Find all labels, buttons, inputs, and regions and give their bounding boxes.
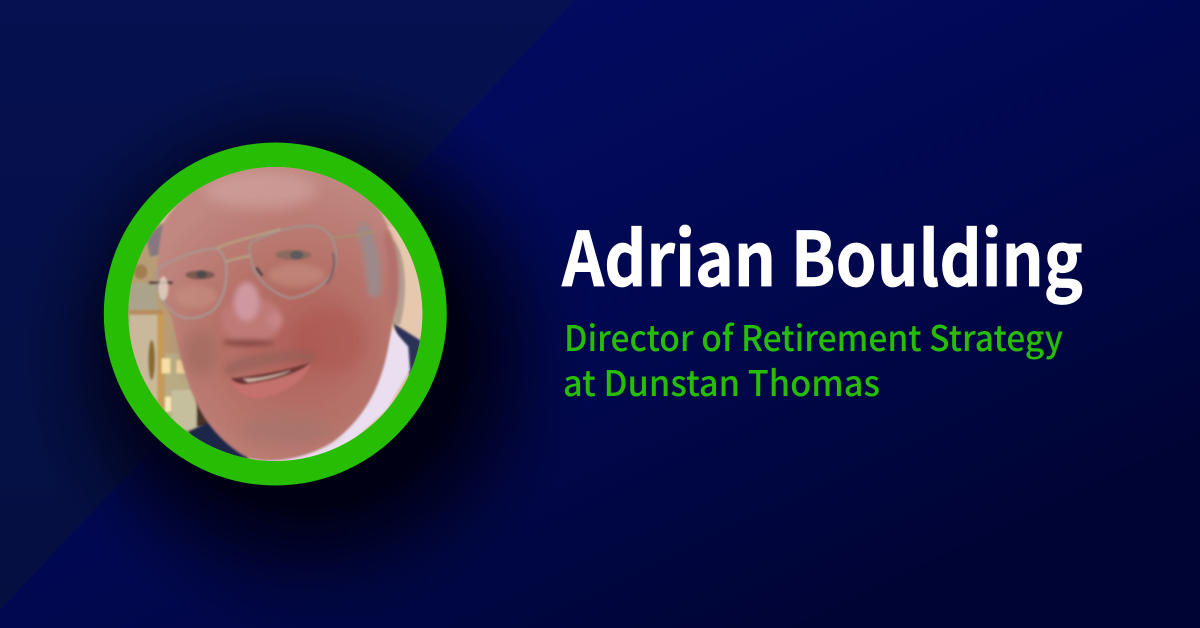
portrait photo bbox=[127, 153, 427, 465]
nose bbox=[221, 282, 283, 346]
glasses bbox=[150, 226, 375, 318]
moustache stubble bbox=[223, 351, 317, 377]
shirt collar bbox=[248, 325, 410, 465]
cheek and chin shading bbox=[183, 307, 367, 445]
job title bbox=[563, 311, 1063, 407]
mouth bbox=[231, 363, 311, 398]
sideburn and ear bbox=[357, 220, 398, 313]
photo background: right side and hair bbox=[147, 223, 427, 340]
lens tint bbox=[175, 263, 325, 308]
name heading: Adrian Boulding bbox=[561, 199, 1083, 308]
photo background: ornate room bbox=[128, 222, 209, 444]
jacket bbox=[188, 323, 425, 465]
job title: Director of Retirement Strategy bbox=[564, 311, 1063, 362]
left lens glare bbox=[158, 276, 168, 300]
forehead highlight bbox=[203, 172, 317, 208]
face bbox=[157, 153, 398, 461]
portrait ring bbox=[104, 142, 447, 486]
eyes bbox=[185, 250, 311, 279]
job title: at Dunstan Thomas bbox=[563, 356, 880, 407]
